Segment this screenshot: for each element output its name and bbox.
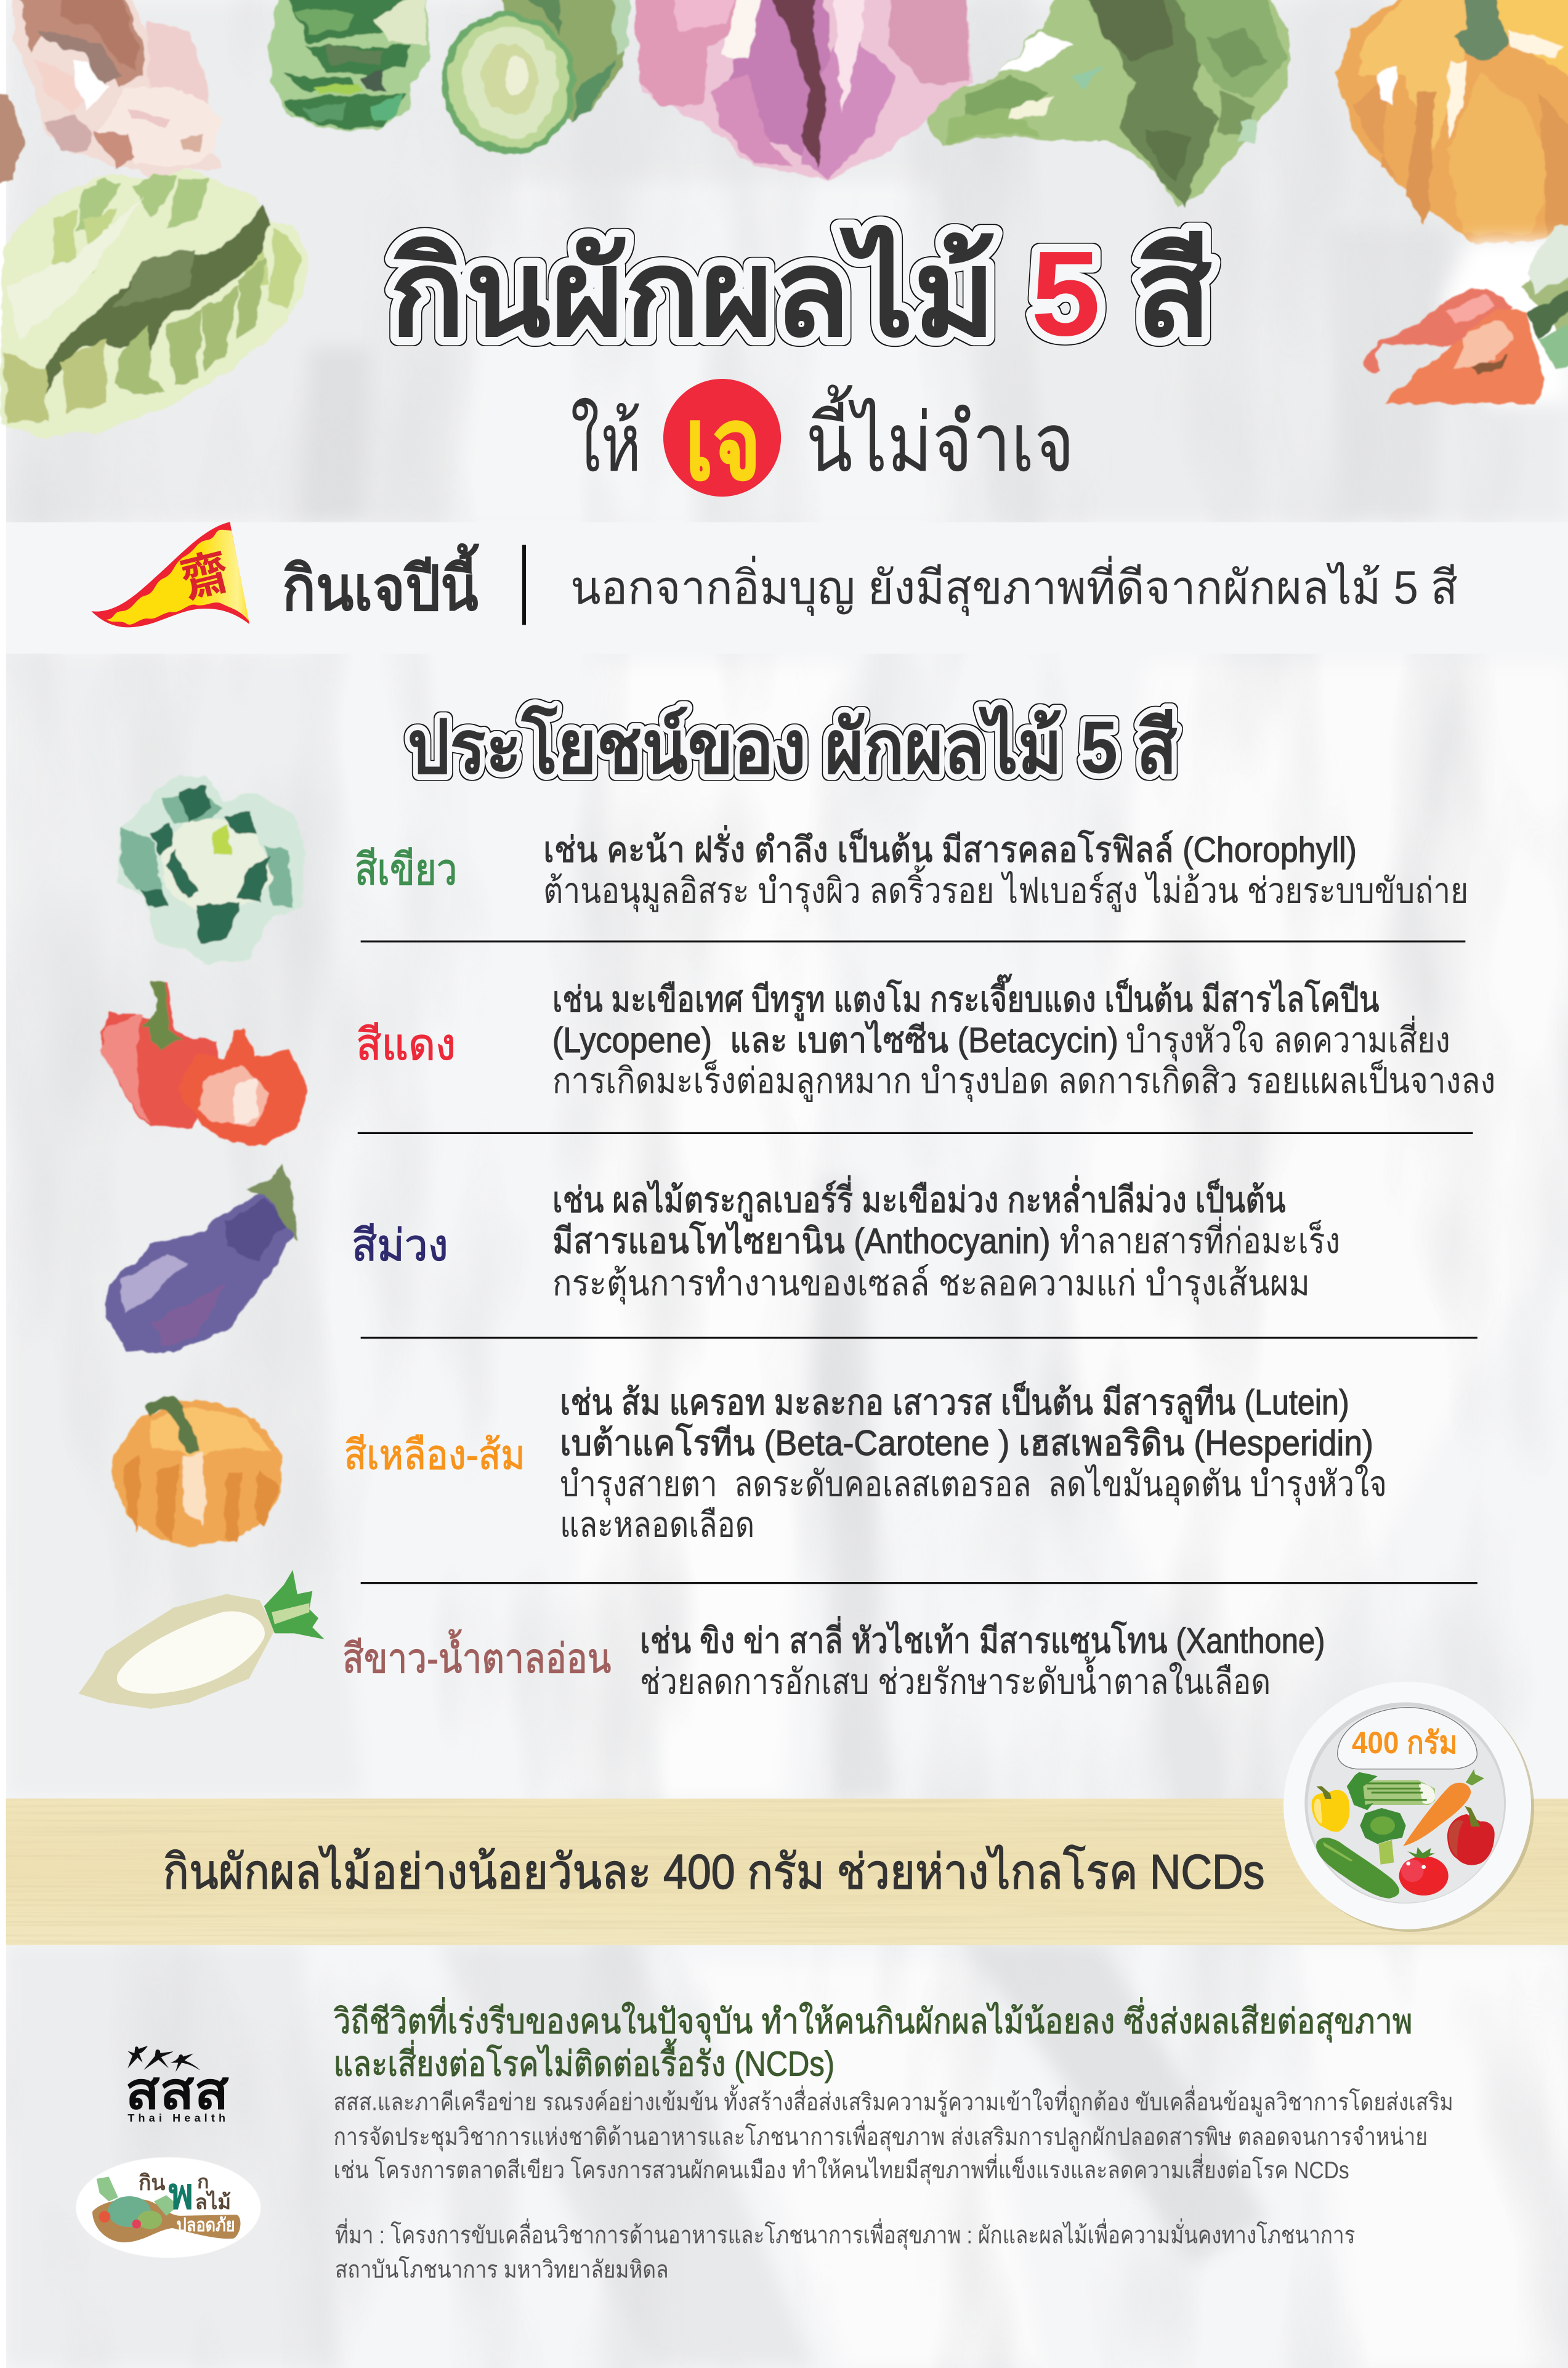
logo: eat safe vegetables: ปลอดภัย <box>177 2215 235 2236</box>
text: purple description: กระตุ้นการทำงานของเซลล์ ชะลอความแก่ บำรุงเส้นผม <box>552 1263 1310 1305</box>
icon: jay flag <box>91 522 249 627</box>
icon: celery <box>1347 1772 1435 1810</box>
text: purple description <box>552 1176 1340 1305</box>
label: red: สีแดง <box>356 1021 456 1069</box>
illustration: cucumber slices stack <box>269 0 430 131</box>
logo: Thai Health <box>125 2046 229 2124</box>
text: purple description: ทำลายสารที่ก่อมะเร็ง <box>1059 1217 1340 1261</box>
text: white-brown description <box>640 1616 1325 1701</box>
footer body: การจัดประชุมวิชาการแห่งชาติด้านอาหารและโภชนาการเพื่อสุขภาพ ส่งเสริมการปลูกผักปลอดสารพิษ ตลอดจนการจำหน่าย <box>334 2120 1428 2152</box>
illustration: pumpkin <box>1336 0 1568 241</box>
label: purple: สีม่วง <box>352 1222 448 1270</box>
icon: cucumber <box>1316 1838 1399 1899</box>
icon: green cabbage <box>118 776 306 965</box>
source credit: สถาบันโภชนาการ มหาวิทยาลัยมหิดล <box>335 2256 669 2284</box>
text: purple description: เช่น ผลไม้ตระกูลเบอร์รี่ มะเขือม่วง กะหล่ำปลีม่วง เป็นต้น <box>552 1176 1286 1222</box>
wood band <box>6 1799 1568 1945</box>
icon: red pepper and tomato <box>100 981 308 1146</box>
icon: eggplant <box>106 1162 296 1354</box>
band text: กินผักผลไม้อย่างน้อยวันละ 400 กรัม ช่วยห่างไกลโรค NCDs <box>163 1844 1264 1899</box>
subtitle left: ให้ <box>570 398 641 489</box>
label: white-brown: สีขาว-น้ำตาลอ่อน <box>342 1629 611 1682</box>
icon: daikon <box>78 1594 275 1709</box>
source credit <box>335 2218 1355 2284</box>
text: red description: เช่น มะเขือเทศ บีทรูท แตงโม กระเจี๊ยบแดง เป็นต้น มีสารไลโคปีน <box>552 973 1380 1021</box>
section heading: ประโยชน์ของ ผักผลไม้ 5 สี <box>408 705 1178 789</box>
illustration: carrots with leaves <box>1362 227 1568 403</box>
banner heading: กินเจปีนี้ <box>282 543 480 623</box>
icon: pumpkin <box>113 1395 282 1546</box>
title: กินผักผลไม้ 5 สี <box>389 224 1212 361</box>
icon: jay flag: 齋 <box>176 544 235 608</box>
plate label <box>1338 1708 1477 1769</box>
text: green description: เช่น คะน้า ฝรั่ง ตำลึง เป็นต้น มีสารคลอโรฟิลล์ (Chorophyll) <box>543 825 1357 870</box>
logo: eat safe vegetables: ลไม้ <box>195 2190 231 2214</box>
text: yellow-orange description: บำรุงสายตา ลดระดับคอเลสเตอรอล ลดไขมันอุดตัน บำรุงหัวใจ <box>560 1464 1387 1506</box>
illustration: mushrooms <box>0 0 220 184</box>
text: white-brown description: ช่วยลดการอักเสบ ช่วยรักษาระดับน้ำตาลในเลือด <box>640 1656 1271 1701</box>
logo: eat safe vegetables: พ <box>168 2170 193 2218</box>
text: red description: (Lycopene) และ เบตาไซซีน (Betacycin) <box>552 1020 1118 1060</box>
label: green: สีเขียว <box>355 846 457 894</box>
icon: red pepper <box>1447 1806 1495 1865</box>
illustration: broccoli <box>925 0 1290 208</box>
logo: Thai Health: สสส <box>125 2062 229 2120</box>
jay badge: เจ <box>685 389 761 500</box>
footer body: เช่น โครงการตลาดสีเขียว โครงการสวนผักคนเมือง ทำให้คนไทยมีสุขภาพที่แข็งแรงและลดความเสี่ยงต่อโรค NCDs <box>334 2153 1349 2185</box>
footer heading: วิถีชีวิตที่เร่งรีบของคนในปัจจุบัน ทำให้คนกินผักผลไม้น้อยลง ซึ่งส่งผลเสียต่อสุขภาพ <box>334 1998 1413 2043</box>
icon: three figures <box>127 2046 200 2072</box>
text: purple description: มีสารแอนโทไซยานิน (Anthocyanin) <box>552 1220 1051 1261</box>
source credit: ที่มา : โครงการขับเคลื่อนวิชาการด้านอาหารและโภชนาการเพื่อสุขภาพ : ผักและผลไม้เพื่อความมั่นคงทางโภชนาการ <box>335 2218 1355 2250</box>
icon: carrot <box>1403 1769 1484 1846</box>
icon: tomato <box>1399 1847 1449 1896</box>
text: yellow-orange description: และหลอดเลือด <box>560 1506 754 1545</box>
text: red description <box>552 973 1495 1103</box>
icon: broccoli <box>1360 1808 1406 1865</box>
text: white-brown description: เช่น ขิง ข่า สาลี่ หัวไชเท้า มีสารแซนโทน (Xanthone) <box>640 1616 1325 1661</box>
label: yellow-orange: สีเหลือง-ส้ม <box>344 1432 525 1478</box>
text: yellow-orange description <box>560 1381 1387 1545</box>
text: green description <box>543 825 1468 912</box>
icon: yellow pepper <box>1312 1786 1349 1832</box>
banner text: นอกจากอิ่มบุญ ยังมีสุขภาพที่ดีจากผักผลไม้ 5 สี <box>570 556 1458 616</box>
illustration: lettuce <box>0 169 309 438</box>
plate label: 400 กรัม <box>1352 1725 1458 1760</box>
logo: eat safe vegetables: ก <box>197 2172 209 2192</box>
banner <box>6 522 1568 654</box>
logo: Thai Health: Thai Health <box>127 2112 225 2124</box>
illustration: cucumber slice <box>433 0 629 163</box>
illustration: purple cabbage <box>636 0 972 180</box>
plate with vegetables <box>1283 1682 1534 1932</box>
footer body <box>334 2085 1453 2185</box>
footer heading: และเสี่ยงต่อโรคไม่ติดต่อเรื้อรัง (NCDs) <box>334 2038 835 2083</box>
logo: eat safe vegetables <box>76 2157 261 2258</box>
icon: daikon leaves <box>264 1570 325 1639</box>
logo: eat safe vegetables: กิน <box>139 2171 165 2195</box>
footer heading <box>334 1998 1413 2083</box>
text: yellow-orange description: เบต้าแคโรทีน (Beta-Carotene ) เฮสเพอริดิน (Hesperidin) <box>560 1422 1373 1463</box>
text: red description: บำรุงหัวใจ ลดความเสี่ยง <box>1126 1016 1450 1062</box>
text: yellow-orange description: เช่น ส้ม แครอท มะละกอ เสาวรส เป็นต้น มีสารลูทีน (Lutein) <box>560 1381 1349 1424</box>
subtitle right: นี้ไม่จำเจ <box>806 385 1075 489</box>
